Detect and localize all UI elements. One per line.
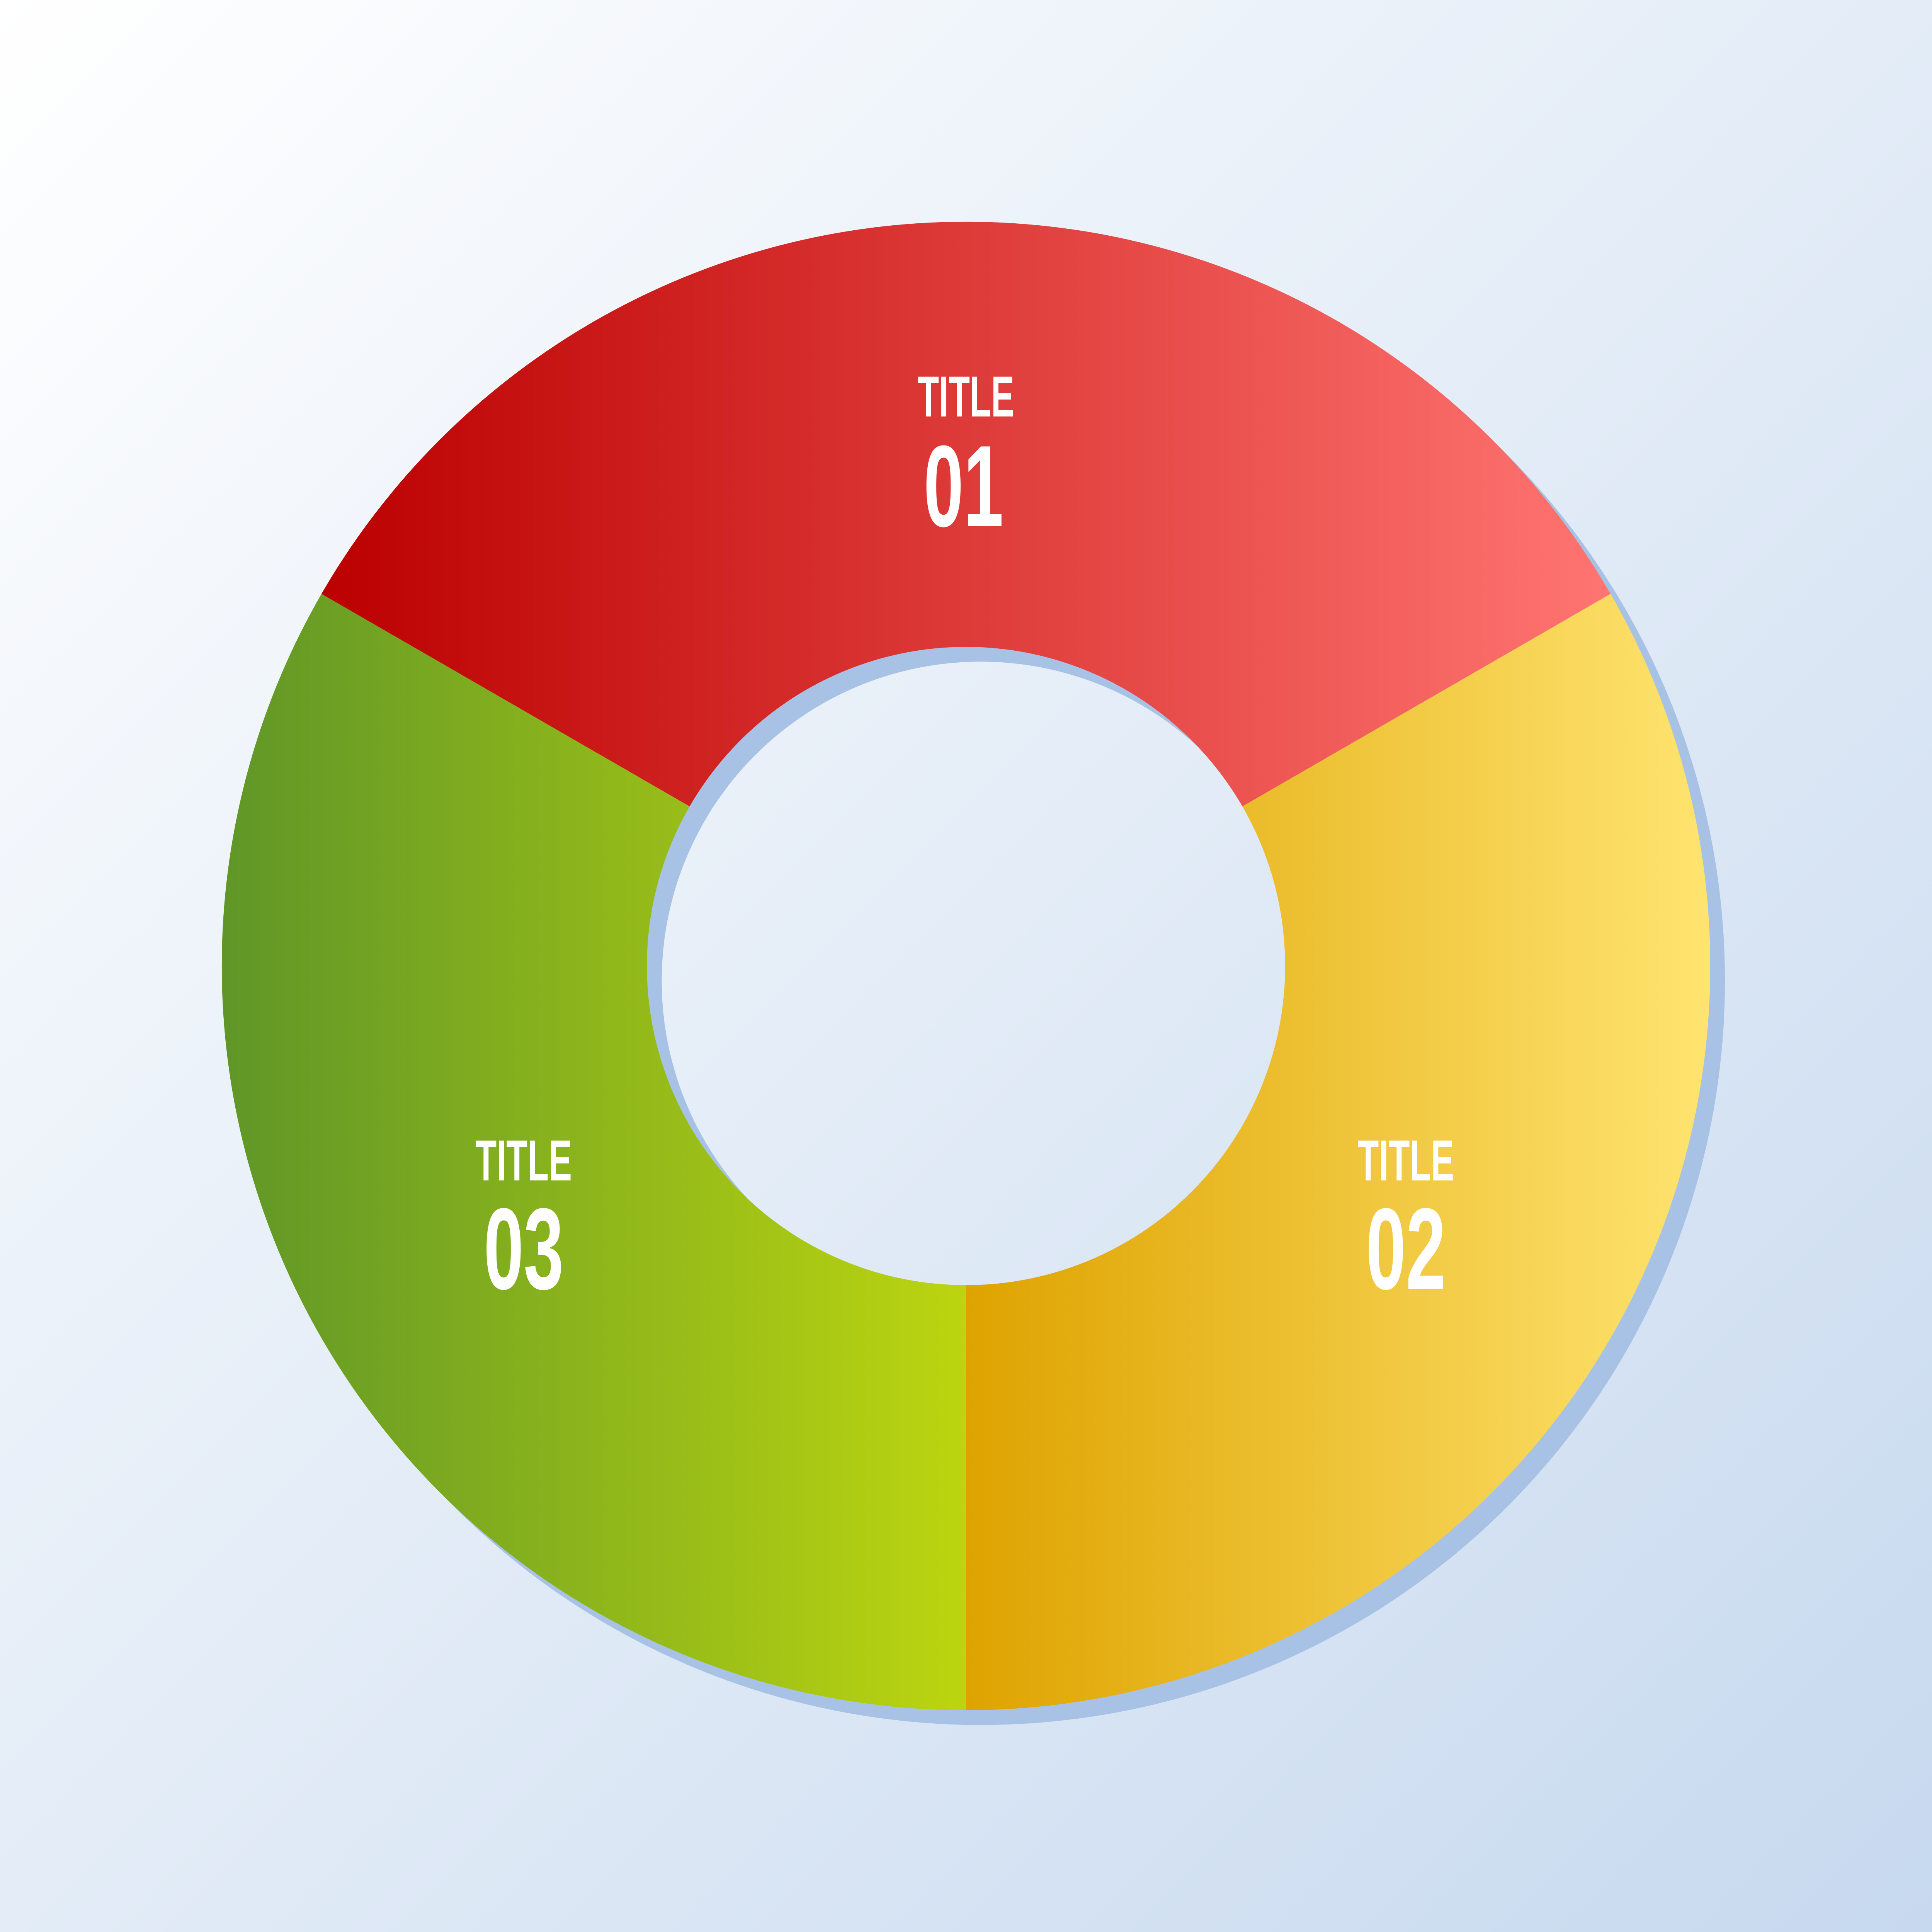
segment 02: yellow (966, 594, 1710, 1710)
label 03: TITLE (475, 1128, 572, 1193)
label 02: TITLE (1358, 1128, 1454, 1193)
label 01: 01 (923, 421, 1003, 551)
ring shadow (236, 236, 1725, 1725)
label 01 (918, 364, 1014, 551)
label 02: 02 (1366, 1184, 1446, 1313)
label 02 (1358, 1128, 1454, 1313)
segment 01: red (321, 222, 1611, 806)
segment 03: green (222, 594, 966, 1710)
label 03: 03 (484, 1184, 564, 1313)
label 01: TITLE (918, 364, 1014, 429)
label 03 (475, 1128, 572, 1313)
